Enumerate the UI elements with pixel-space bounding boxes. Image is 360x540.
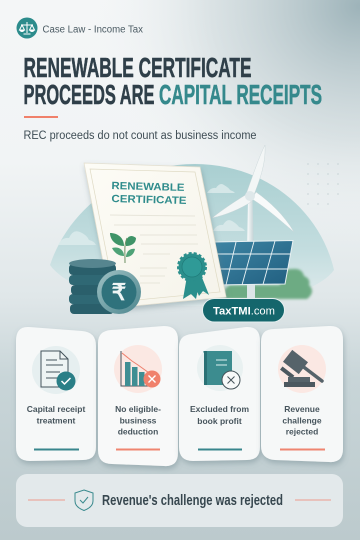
badge: TaxTMI.com	[202, 298, 284, 322]
label: No eligible-	[115, 404, 161, 414]
solar panel	[214, 240, 293, 285]
certificate: RENEWABLE	[111, 180, 185, 194]
label: challenge	[282, 416, 322, 426]
certificate: CERTIFICATE	[111, 193, 187, 207]
icon: book with cross	[197, 345, 243, 391]
icon: gavel	[278, 345, 326, 393]
coin stack	[69, 259, 141, 314]
label: book profit	[197, 416, 242, 426]
label: Revenue	[284, 404, 320, 414]
label: Capital receipt	[27, 404, 85, 414]
panel: revenue challenge rejected	[261, 326, 343, 462]
header badge: case law	[16, 18, 143, 38]
accent rule	[24, 116, 58, 118]
accent bar	[116, 448, 160, 450]
coin stack: ₹	[112, 279, 127, 305]
clouds	[58, 184, 245, 245]
certificate	[84, 163, 226, 308]
bushes	[225, 269, 312, 299]
title	[24, 52, 322, 110]
accent bar	[280, 448, 325, 450]
dot pattern	[307, 163, 339, 205]
wind turbine	[212, 145, 294, 258]
subtitle: REC proceeds do not count as business income	[24, 130, 256, 142]
badge label: Case Law - Income Tax	[42, 24, 143, 36]
panel: excluded from book profit	[179, 327, 260, 461]
label: deduction	[118, 426, 158, 436]
accent bar	[34, 448, 79, 450]
panel: capital receipt treatment	[16, 327, 96, 461]
title: PROCEEDS ARE	[24, 79, 154, 110]
badge: TaxTMI.com: TaxTMI.com	[213, 306, 275, 318]
label: business	[120, 416, 157, 426]
icon: scales of justice	[16, 18, 38, 38]
accent bar	[198, 448, 242, 450]
icon: rosette seal	[178, 254, 209, 299]
label: Excluded from	[190, 404, 249, 414]
icon: document with check	[32, 346, 80, 394]
icon: shield check	[75, 490, 93, 510]
label: treatment	[37, 416, 76, 426]
callout: challenge rejected	[16, 474, 343, 527]
callout text: Revenue's challenge was rejected	[102, 493, 283, 509]
hill backdrop	[50, 164, 334, 306]
icon: declining chart with cross	[114, 345, 162, 393]
label: rejected	[286, 426, 318, 436]
panel post	[247, 283, 255, 299]
hero illustration	[50, 145, 339, 322]
icon: plant sprig	[110, 233, 136, 263]
panel: no eligible business deduction	[98, 326, 178, 466]
